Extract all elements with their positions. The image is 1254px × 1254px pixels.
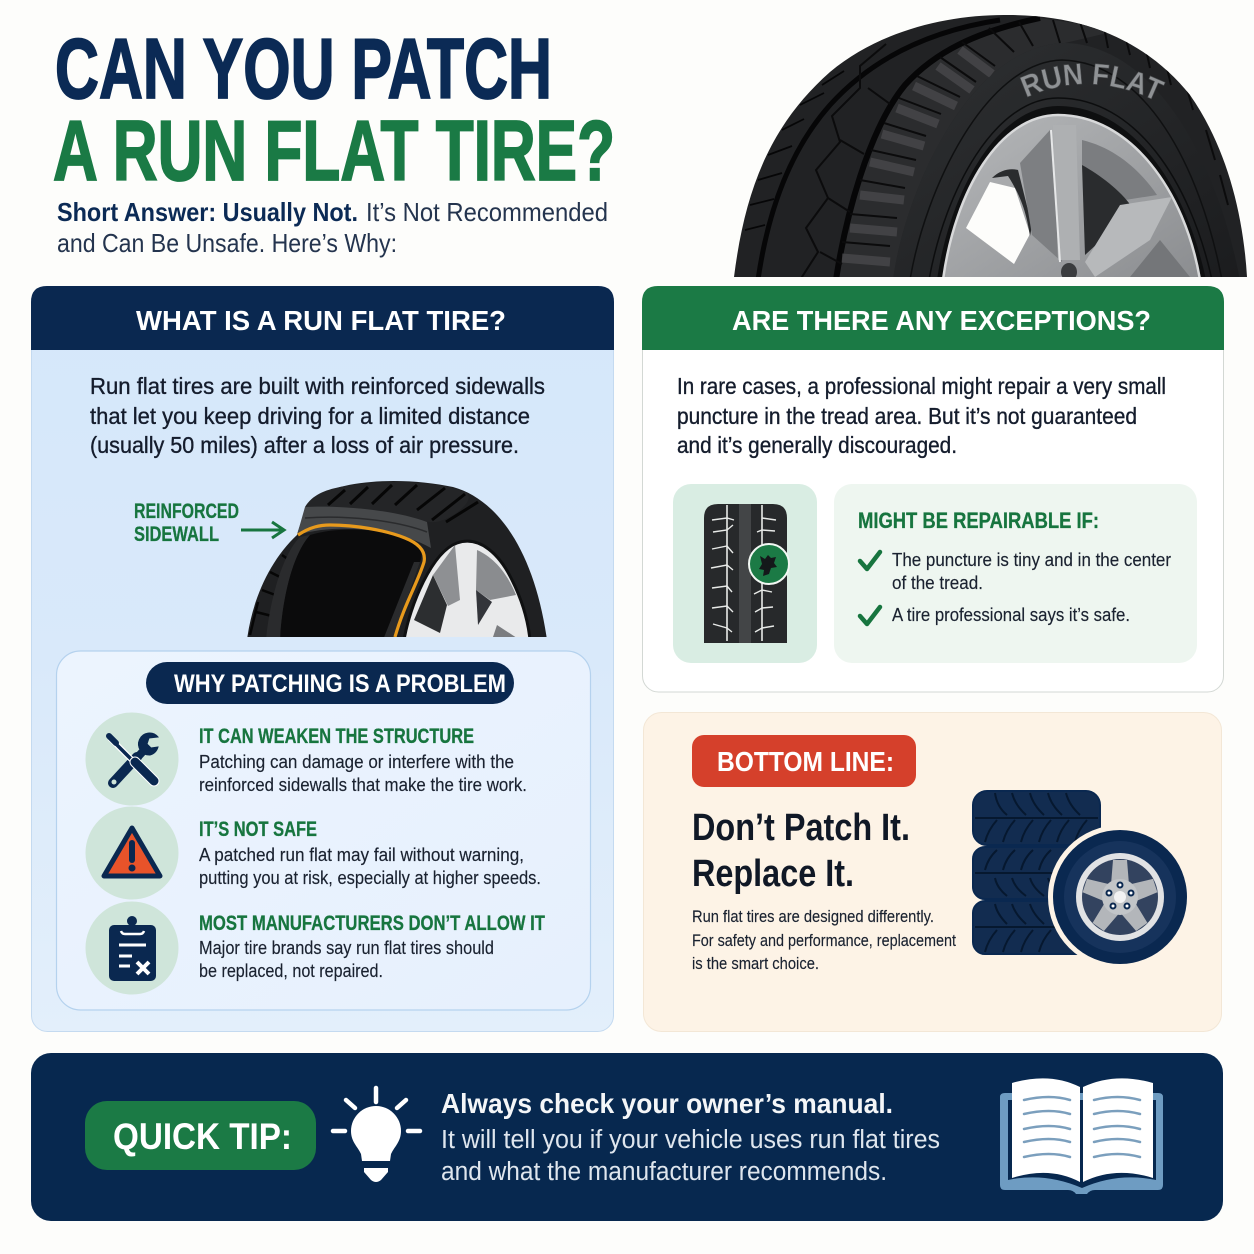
panel: what is a run flat tire	[31, 286, 614, 1032]
bottom line badge	[692, 735, 916, 787]
bottom line headline	[692, 807, 910, 895]
arrow	[241, 522, 284, 538]
description text: (usually 50 miles) after a loss of air pressure.	[90, 432, 519, 458]
panel header	[642, 286, 1224, 350]
tread grooves	[745, 18, 1040, 280]
subtitle: short answer: It’s Not Recommended	[366, 197, 608, 227]
check icon	[860, 552, 880, 569]
icon: stack of tires with wheel	[973, 791, 1192, 969]
exceptions text: puncture in the tread area. But it’s not guaranteed	[677, 403, 1137, 429]
description text: that let you keep driving for a limited distance	[90, 403, 530, 429]
quick tip text: Always check your owner’s manual.	[441, 1088, 893, 1119]
quick tip badge	[85, 1101, 316, 1170]
sidewall and rim	[404, 541, 530, 640]
subtitle: short answer	[57, 197, 608, 258]
hero image: run flat tire: RUN FLAT	[1020, 63, 1166, 100]
orange reinforcement line	[298, 525, 424, 637]
item text: weaken the structure: Patching can damage or interfere with the	[199, 752, 514, 772]
bottom line headline: Don’t Patch It.	[692, 807, 910, 849]
bottom line text: is the smart choice.	[692, 954, 819, 973]
check item: professional says safe: A tire professional says it’s safe.	[892, 605, 1130, 625]
bottom line text: For safety and performance, replacement	[692, 931, 956, 950]
tread puncture illustration	[673, 484, 817, 663]
item text: manufacturers: MOST MANUFACTURERS DON’T ALLOW IT	[199, 912, 545, 935]
box: might be repairable if: MIGHT BE REPAIRABLE IF:	[858, 508, 1099, 533]
exceptions text	[677, 373, 1166, 458]
icon: clipboard	[86, 902, 178, 994]
icon: warning triangle	[86, 806, 178, 900]
sidewall lettering	[1026, 84, 1160, 103]
tread on cut section	[305, 486, 344, 507]
quick tip text: It will tell you if your vehicle uses run flat tires	[441, 1126, 940, 1154]
title: CAN YOU PATCH	[55, 22, 552, 117]
shoulder blocks	[842, 50, 992, 262]
label: reinforced sidewall: SIDEWALL	[134, 523, 219, 546]
check item: tiny puncture: The puncture is tiny and in the center	[892, 550, 1171, 570]
item text: not safe: A patched run flat may fail without warning,	[199, 845, 524, 865]
exceptions text: and it’s generally discouraged.	[677, 432, 957, 458]
description text: Run flat tires are built with reinforced sidewalls	[90, 373, 545, 399]
icon: open book	[1000, 1078, 1163, 1194]
item text: manufacturers: be replaced, not repaired.	[199, 961, 383, 981]
label: reinforced sidewall	[134, 500, 239, 546]
shoulder band	[836, 18, 1120, 280]
check icon	[860, 607, 880, 624]
item text: manufacturers	[199, 912, 545, 981]
subtitle: short answer: and Can Be Unsafe. Here’s Why:	[57, 228, 397, 258]
cavity	[280, 530, 422, 640]
panel: bottom line	[644, 712, 1222, 1032]
exceptions text: In rare cases, a professional might repair a very small	[677, 373, 1166, 399]
item text: not safe	[199, 818, 541, 888]
quick tip text: and what the manufacturer recommends.	[441, 1158, 887, 1186]
title	[53, 22, 615, 199]
quick tip text	[441, 1088, 940, 1186]
section pill heading: WHY PATCHING IS A PROBLEM	[174, 670, 506, 698]
bottom line badge: BOTTOM LINE:	[717, 746, 894, 777]
check item: tiny puncture	[892, 550, 1171, 593]
section pill heading	[146, 662, 514, 704]
tire cutaway illustration	[247, 481, 547, 640]
panel: quick tip	[31, 1053, 1223, 1221]
item text: weaken the structure	[199, 725, 527, 795]
sidewall	[924, 43, 1092, 176]
item text: weaken the structure: reinforced sidewalls that make the tire work.	[199, 775, 527, 795]
check item: tiny puncture: of the tread.	[892, 573, 983, 593]
title: A RUN FLAT TIRE?	[53, 104, 615, 199]
icon: tools	[86, 712, 178, 806]
bottom line headline: Replace It.	[692, 853, 854, 895]
subtitle: short answer: Short Answer: Usually Not.	[57, 197, 358, 227]
label: reinforced sidewall: REINFORCED	[134, 500, 239, 523]
item text: not safe: putting you at risk, especially at higher speeds.	[199, 868, 541, 888]
description text	[90, 373, 545, 458]
box: might be repairable if	[834, 484, 1197, 663]
quick tip badge: QUICK TIP:	[113, 1116, 292, 1157]
icon: light bulb	[333, 1088, 420, 1182]
rim windows	[966, 182, 1030, 264]
bottom line text	[692, 907, 956, 973]
hero image: run flat tire	[734, 15, 1247, 277]
panel: why patching is a problem	[56, 651, 590, 1010]
item text: not safe: IT’S NOT SAFE	[199, 818, 317, 841]
panel: are there any exceptions	[642, 286, 1224, 692]
rim	[943, 115, 1200, 280]
panel header: ARE THERE ANY EXCEPTIONS?	[732, 305, 1151, 336]
panel header	[31, 286, 614, 350]
item text: weaken the structure: IT CAN WEAKEN THE STRUCTURE	[199, 725, 474, 748]
bottom line text: Run flat tires are designed differently.	[692, 907, 934, 926]
item text: manufacturers: Major tire brands say run flat tires should	[199, 938, 494, 958]
panel header: WHAT IS A RUN FLAT TIRE?	[136, 305, 506, 336]
